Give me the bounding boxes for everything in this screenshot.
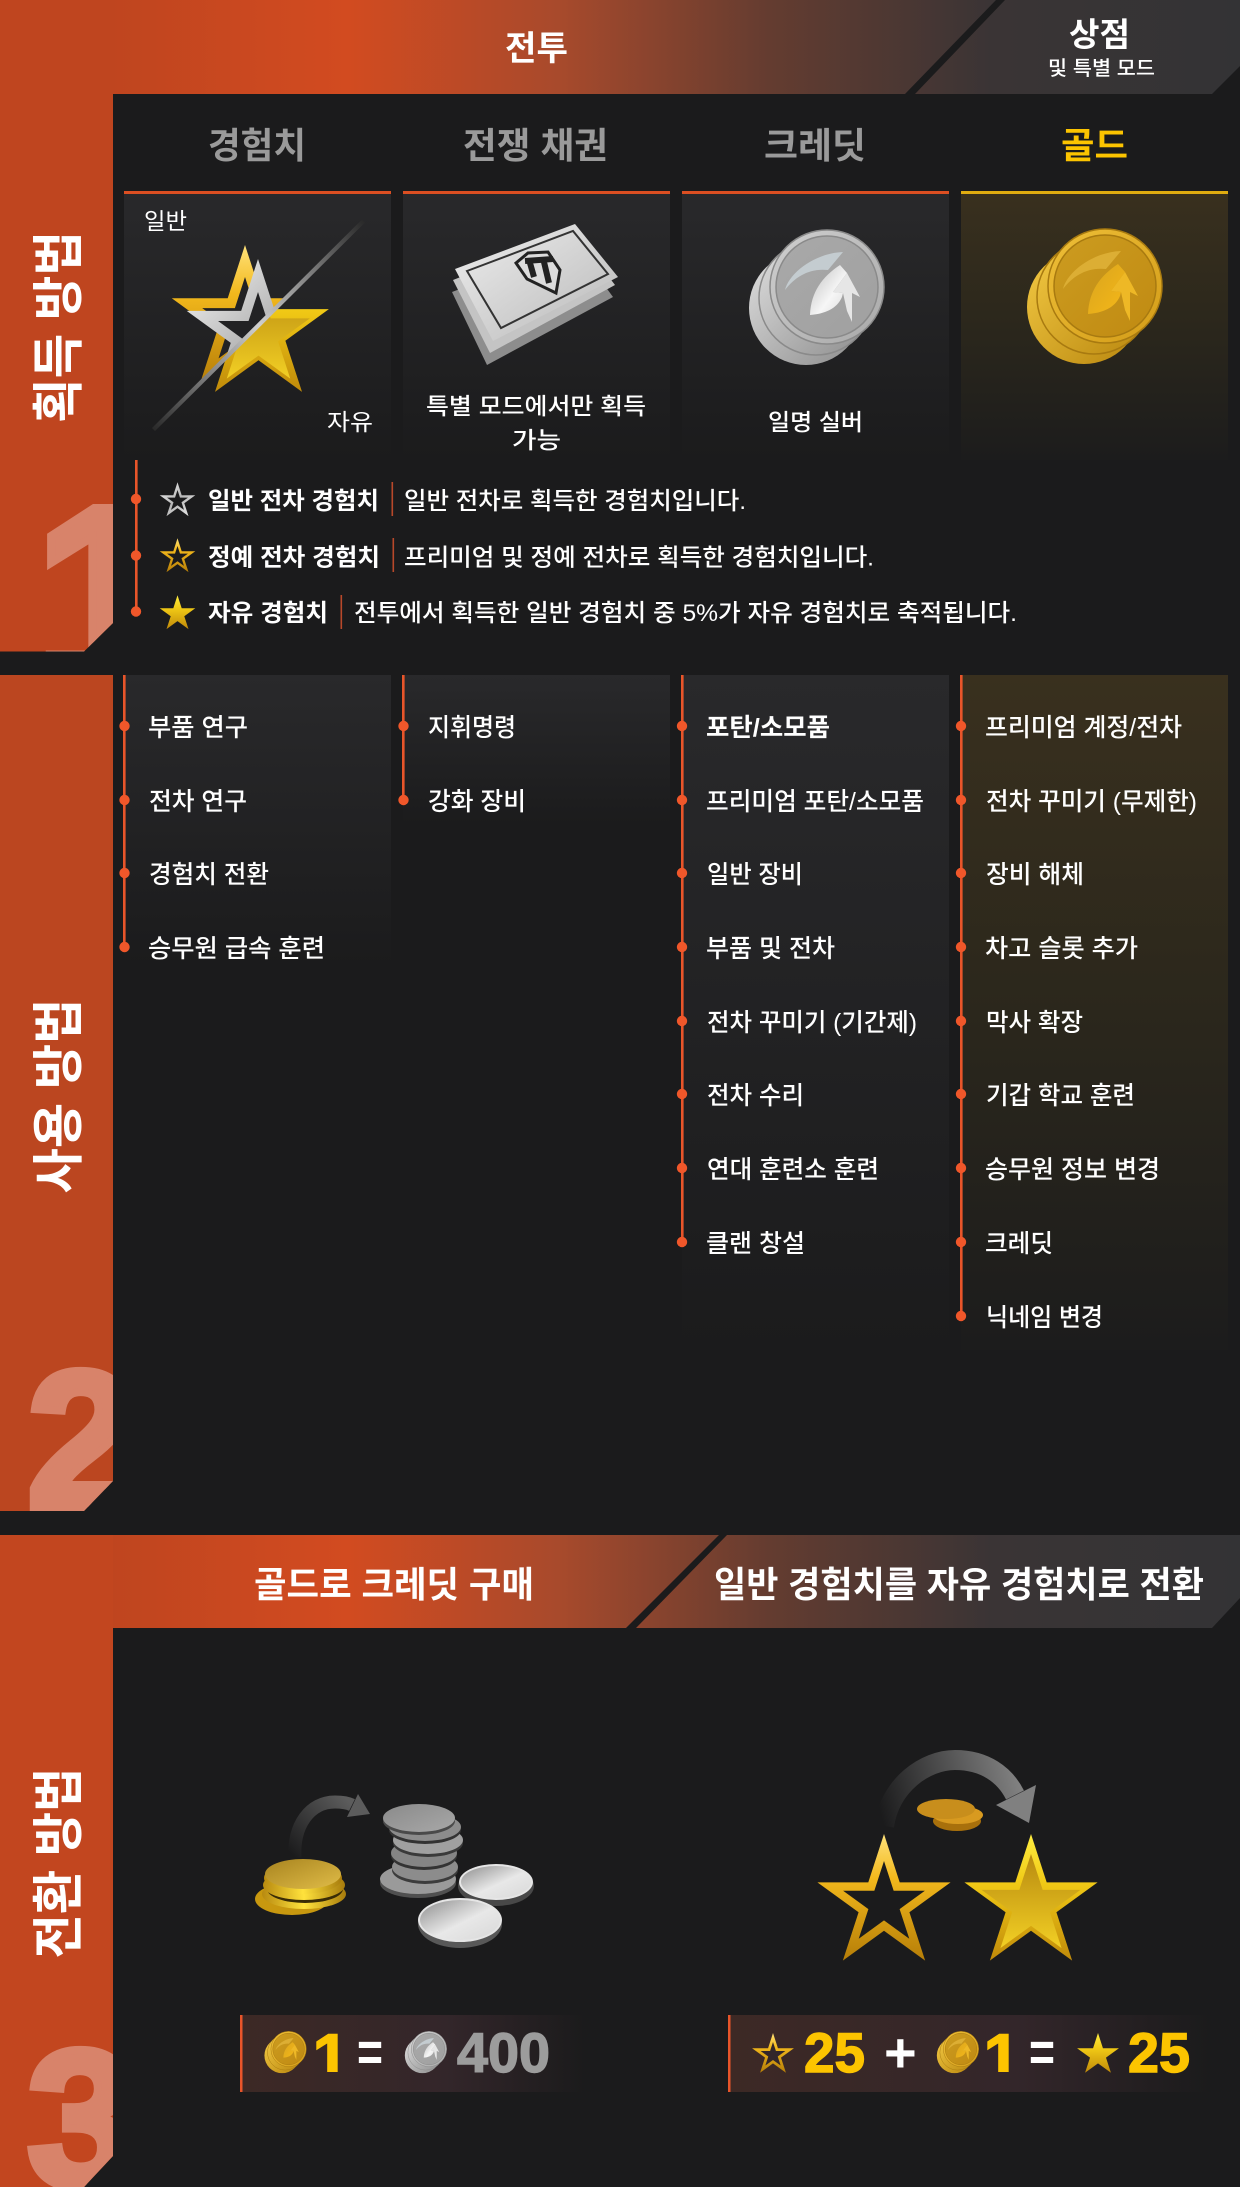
list: credit uses: 연대 훈련소 훈련 — [707, 1156, 879, 1184]
arrow: conversion — [884, 1760, 1036, 1826]
panel: credits: 일명 실버 — [768, 409, 863, 435]
formula: experience conversion: + — [884, 2021, 917, 2084]
header band — [0, 1535, 1240, 1628]
legend row: normal tank experience: 일반 전차 경험치 — [208, 488, 379, 515]
icon: small coin — [937, 2031, 979, 2073]
legend row: elite tank experience — [160, 538, 874, 572]
header band — [0, 0, 1240, 94]
left sidebar 2: 2 — [27, 1331, 135, 1549]
list: experience uses — [119, 675, 391, 967]
list: experience uses: 부품 연구 — [148, 714, 248, 742]
icon: silver coin stack — [380, 1804, 534, 1948]
list: gold uses: 차고 슬롯 추가 — [985, 935, 1138, 963]
header band: 전투 — [505, 30, 568, 68]
list: credit uses: 부품 및 전차 — [706, 935, 835, 963]
icon: small filled star — [1077, 2033, 1119, 2073]
section 2: how to use — [0, 675, 1228, 1549]
panel: war bonds: 특별 모드에서만 획득 — [426, 393, 646, 419]
left sidebar 1: 1 — [34, 454, 173, 733]
list: experience uses: 경험치 전환 — [149, 861, 269, 889]
list: gold uses: 막사 확장 — [986, 1009, 1083, 1037]
panel: experience: 일반 — [144, 208, 187, 234]
section 1: how to earn — [0, 0, 1240, 652]
column headings: 경험치 — [208, 125, 306, 166]
column headings: 크레딧 — [764, 125, 866, 166]
legend row: free experience: 자유 경험치 — [208, 600, 328, 627]
formula: experience conversion: = — [1029, 2020, 1055, 2083]
list: experience uses: 승무원 급속 훈련 — [148, 935, 325, 963]
list: credit uses: 일반 장비 — [707, 861, 803, 889]
legend row: normal tank experience: 일반 전차로 획득한 경험치입니다. — [404, 488, 746, 515]
legend row: elite tank experience: 정예 전차 경험치 — [208, 544, 380, 572]
left sidebar 3 — [0, 1628, 113, 2187]
formula: experience conversion: 25 — [804, 2021, 865, 2084]
formula: gold to credits: 1 — [312, 2020, 349, 2094]
list: credit uses: 포탄/소모품 — [706, 714, 830, 742]
icon: gold coin stack — [255, 1859, 346, 1915]
header band: 일반 경험치를 자유 경험치로 전환 — [714, 1564, 1204, 1605]
list: credit uses: 클랜 창설 — [706, 1230, 805, 1258]
icon: gold coins — [1027, 229, 1162, 364]
formula: gold to credits: = — [357, 2020, 383, 2083]
list: experience uses: 전차 연구 — [149, 788, 247, 816]
list: credit uses: 전차 꾸미기 (기간제) — [707, 1009, 917, 1037]
arrow: gold to credits — [295, 1794, 370, 1858]
list: gold uses: 전차 꾸미기 (무제한) — [986, 788, 1197, 816]
header band: 및 특별 모드 — [1048, 57, 1155, 80]
list: gold uses: 크레딧 — [985, 1230, 1053, 1258]
legend row: free experience: 전투에서 획득한 일반 경험치 중 5%가 자유 경험치로 축적됩니다. — [354, 600, 1017, 627]
icon: split experience star — [152, 220, 365, 431]
left sidebar 2 — [0, 675, 113, 1511]
panel: experience — [124, 191, 391, 432]
left sidebar 2: 사용 방법 — [31, 998, 89, 1194]
formula: experience conversion: 1 — [984, 2020, 1020, 2094]
panel: credits — [682, 191, 949, 460]
legend timeline — [131, 460, 1017, 629]
legend row: free experience — [160, 595, 1017, 629]
icon: small silver coin — [405, 2031, 447, 2073]
left sidebar 1 — [0, 94, 113, 652]
formula: experience conversion: 25 — [1128, 2021, 1190, 2084]
panel: war bonds — [403, 191, 670, 460]
panel: gold — [961, 191, 1228, 460]
list: war bond uses — [398, 675, 670, 825]
panel: experience: 자유 — [327, 409, 373, 435]
column headings: 전쟁 채권 — [463, 125, 608, 166]
list: gold uses: 프리미엄 계정/전차 — [985, 714, 1182, 742]
formula: gold to credits — [240, 2015, 548, 2092]
left sidebar 1: 획득 방법 — [31, 231, 89, 423]
list: war bond uses: 강화 장비 — [428, 788, 526, 816]
legend row: elite tank experience: 프리미엄 및 정예 전차로 획득한 경험치입니다. — [404, 544, 874, 572]
icon: filled star — [964, 1834, 1098, 1961]
icon: small gold coin — [264, 2031, 306, 2073]
icon: silver coins — [749, 230, 884, 365]
header band: 상점 — [1069, 16, 1130, 53]
formula: experience conversion — [728, 2015, 1209, 2094]
panel: war bonds: 가능 — [512, 427, 561, 453]
legend row: normal tank experience — [160, 482, 746, 516]
list: gold uses: 닉네임 변경 — [986, 1304, 1103, 1332]
icon: small outline star — [752, 2033, 794, 2073]
icon: small gold coins — [917, 1799, 983, 1831]
list: gold uses — [956, 675, 1228, 1350]
section 3: how to convert — [0, 1535, 1240, 2187]
formula: gold to credits: 400 — [457, 2021, 550, 2084]
list: war bond uses: 지휘명령 — [428, 714, 516, 742]
header band: 골드로 크레딧 구매 — [254, 1564, 534, 1605]
column headings: 골드 — [1061, 125, 1128, 166]
left sidebar 3: 전환 방법 — [31, 1768, 89, 1958]
list: gold uses: 장비 해체 — [986, 861, 1084, 889]
list: gold uses: 기갑 학교 훈련 — [986, 1082, 1135, 1110]
list: credit uses: 전차 수리 — [707, 1082, 804, 1110]
list: credit uses: 프리미엄 포탄/소모품 — [706, 788, 924, 816]
list: credit uses — [677, 675, 949, 1350]
column headings — [208, 125, 1128, 166]
icon: outline star — [817, 1834, 951, 1961]
illustration: gold to credits — [255, 1794, 534, 1948]
icon: bond tickets — [452, 224, 618, 365]
illustration: normal to free experience — [817, 1760, 1098, 1961]
list: gold uses: 승무원 정보 변경 — [985, 1156, 1160, 1184]
